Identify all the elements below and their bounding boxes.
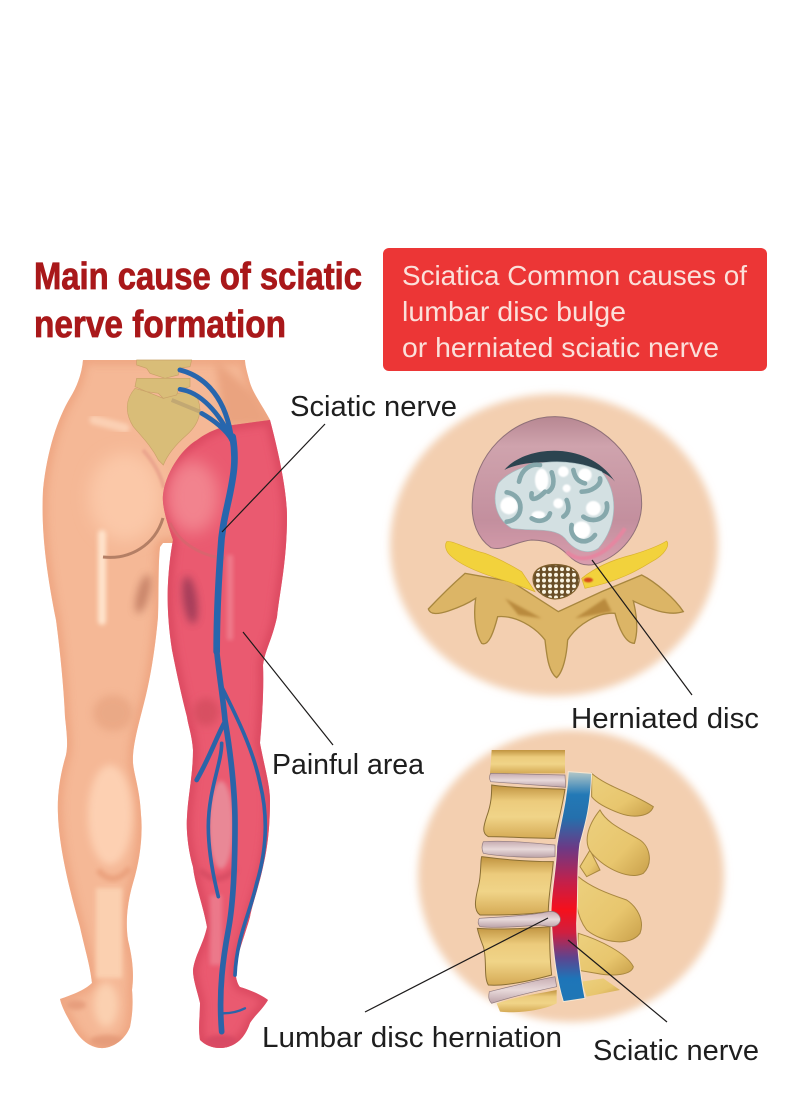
yellow ligament (446, 541, 668, 592)
facet joints (576, 773, 653, 997)
sciatic nerve: lower leg branches (197, 650, 265, 1032)
vertebral bodies (475, 750, 565, 1012)
label: painful area: Painful area (272, 749, 425, 781)
bone shading (505, 598, 612, 618)
healthy skin leg and pelvis (43, 360, 272, 1048)
disc nucleus (495, 462, 614, 552)
title: Main cause of sciatic (34, 256, 362, 298)
spinal cord (533, 565, 579, 599)
inflammation spot (584, 578, 593, 582)
disc outer ring (472, 417, 642, 565)
nerve canal gradient (551, 772, 592, 1002)
nucleus folds (507, 465, 607, 541)
leader lines (222, 424, 692, 1022)
nucleus blobs (500, 466, 601, 539)
dark crescent (504, 451, 615, 482)
sciatic nerve: upper roots (180, 370, 234, 652)
vertebra bone (428, 573, 683, 678)
label: sciatic nerve top: Sciatic nerve (290, 391, 457, 423)
label: herniated disc: Herniated disc (571, 703, 759, 735)
title (34, 256, 362, 346)
lumbar vertebrae and sacrum (127, 360, 200, 465)
painful area: red leg (163, 420, 287, 1048)
panel: spine side view circle (418, 730, 724, 1022)
panel: common causes callout: or herniated sciatic nerve (402, 332, 719, 363)
panel: common causes callout (383, 248, 767, 371)
label: sciatic nerve bottom: Sciatic nerve (593, 1035, 759, 1067)
labels (262, 391, 759, 1067)
panel: common causes callout: lumbar disc bulge (402, 296, 626, 327)
intervertebral discs (482, 773, 566, 1003)
herniation highlight (567, 528, 625, 558)
herniated disc (478, 911, 560, 927)
label: lumbar disc herniation: Lumbar disc herniation (262, 1022, 562, 1054)
title: nerve formation (34, 304, 286, 346)
panel: common causes callout: Sciatica Common causes of (402, 260, 747, 291)
panel: disc cross-section circle (390, 394, 718, 696)
body illustration: back of legs (43, 360, 287, 1048)
